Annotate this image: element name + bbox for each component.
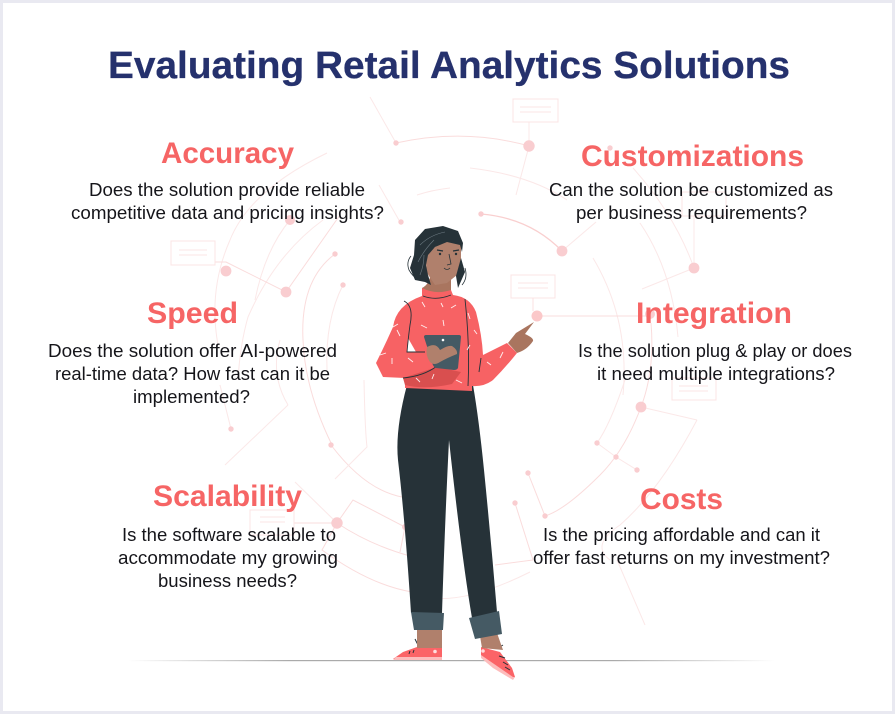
heading: accuracy: Accuracy [161,137,294,170]
text: customizations question: per business requirements? [576,203,807,223]
text: speed question: implemented? [133,387,250,407]
heading: customizations: Customizations [581,140,804,173]
text: speed question: real-time data? How fast can it be [55,364,330,384]
panel: scalability [118,480,338,591]
text: speed question [48,341,337,407]
legs: ankles and trousers [397,385,503,650]
ground line [128,660,775,661]
hands [426,322,534,364]
text: costs question [533,525,830,568]
text: customizations question [549,180,833,223]
tablet [424,335,461,370]
panel: integration [578,297,852,384]
text: scalability question: Is the software scalable to [122,525,336,545]
heading: scalability: Scalability [153,480,302,513]
panel: costs [533,483,830,568]
text: integration question: it need multiple integrations? [597,364,835,384]
text: accuracy question: competitive data and pricing insights? [71,203,384,223]
hair [408,226,466,288]
text: accuracy question: Does the solution provide reliable [89,180,365,200]
head, neck and face [422,240,461,292]
text: scalability question: accommodate my growing [118,548,338,568]
text: customizations question: Can the solution be customized as [549,180,833,200]
heading: costs: Costs [640,483,723,516]
text: accuracy question [71,180,384,223]
sweater [376,288,517,391]
title: Evaluating Retail Analytics Solutions [108,45,790,87]
panel: customizations [549,140,833,223]
heading: speed: Speed [147,297,238,330]
text: scalability question [118,525,338,591]
text: integration question [578,341,852,384]
panel: accuracy [71,137,384,223]
shoes [393,639,515,680]
text: scalability question: business needs? [158,571,297,591]
text: speed question: Does the solution offer AI-powered [48,341,337,361]
background network of arcs, nodes and notes [215,97,697,625]
text: costs question: offer fast returns on my investment? [533,548,830,568]
heading: integration: Integration [636,297,792,330]
text: integration question: Is the solution plug & play or does [578,341,852,361]
text: costs question: Is the pricing affordable and can it [543,525,820,545]
illustration: woman holding a tablet [376,226,534,680]
pointer node near finger [532,310,542,322]
panel: speed [48,297,337,407]
